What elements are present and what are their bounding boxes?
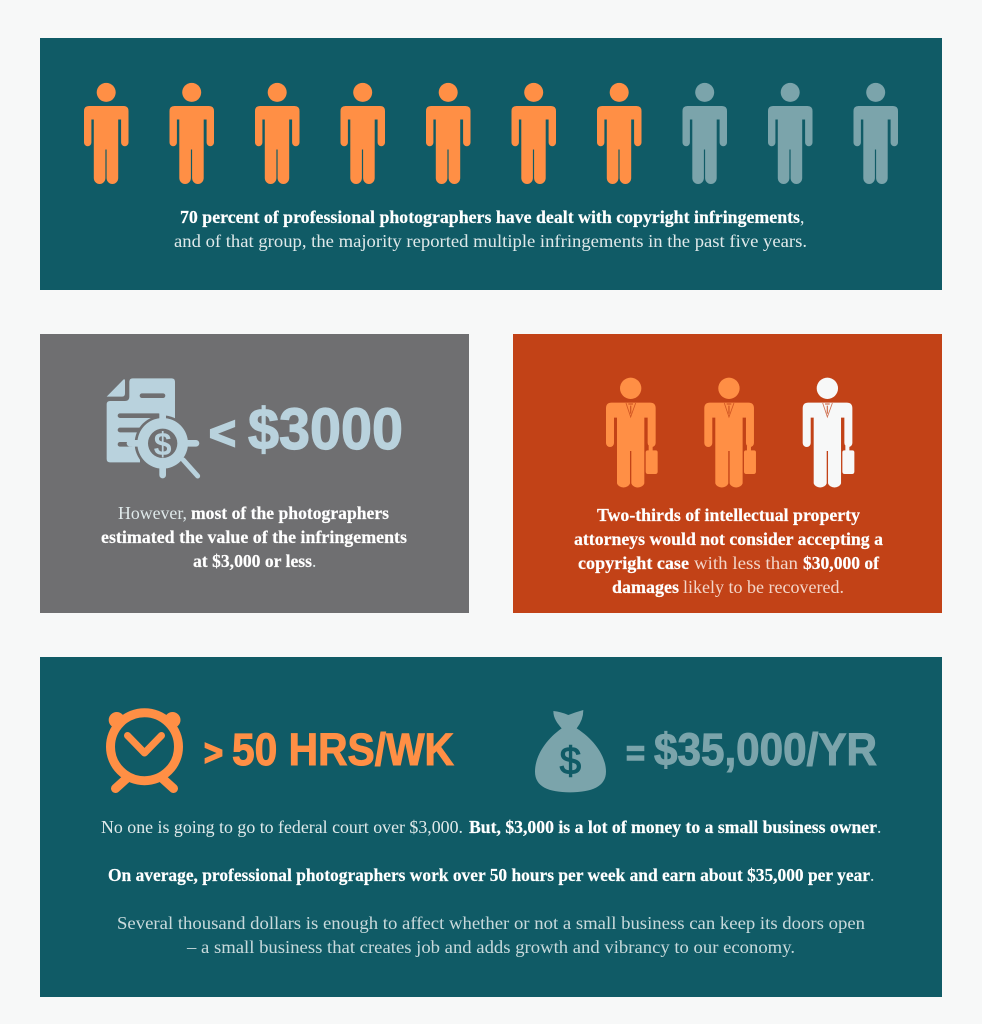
panel: hours and income [40,657,942,997]
panel: intellectual property attorneys [513,334,942,613]
text: hours and earnings statement: . [870,865,874,885]
text: two-thirds of attorneys: Two-thirds of intellectual property [597,505,860,525]
text: 70 percent statement: , [800,207,804,227]
text: 70 percent statement: 70 percent of professional photographers have dealt with copyright infringements [180,207,800,227]
text: 70 percent statement: and of that group, the majority reported multiple infringements in the past five years. [174,231,807,251]
text: two-thirds of attorneys: with less than [694,553,798,573]
text: federal court statement: . [877,817,881,837]
text: small business statement [117,913,865,957]
pictogram: ten people, seven highlighted [84,83,898,184]
figure: more than 50 hours per week: 50 HRS/WK [232,724,454,775]
text: federal court statement: But, $3,000 is a lot of money to a small business owner [469,817,877,837]
text: 70 percent statement [174,207,807,251]
text: federal court statement [101,817,881,837]
text: hours and earnings statement: On average, professional photographers work over 50 hours per week and earn about $35,000 per year [108,865,870,885]
panel: 70 percent of photographers [40,38,942,290]
figure: equals $35,000 per year: = [626,732,645,773]
figure: less than $3000: $3000 [248,397,403,462]
icon: money bag [535,710,606,792]
text: estimated value: However, [118,503,187,523]
text: small business statement: – a small business that creates job and adds growth and vibrancy to our economy. [186,937,795,957]
icon: money bag: $ [560,740,581,783]
text: two-thirds of attorneys: attorneys would not consider accepting a [574,529,883,549]
figure: less than $3000: < [209,407,236,459]
text: two-thirds of attorneys: copyright case [578,553,689,573]
icon: document with dollar magnifier [107,378,198,476]
panel: value of infringements [40,334,469,613]
text: estimated value: estimated the value of the infringements [101,527,407,547]
text: two-thirds of attorneys [574,505,883,597]
text: estimated value: at $3,000 or less [193,551,312,571]
text: two-thirds of attorneys: damages [612,577,679,597]
icon: alarm clock [109,712,180,788]
figure: more than 50 hours per week: > [204,732,223,773]
text: estimated value: most of the photographers [191,503,389,523]
text: federal court statement: No one is going to go to federal court over $3,000. [101,817,463,837]
text: small business statement: Several thousand dollars is enough to affect whether or not a small business can keep its doors open [117,913,865,933]
pictogram: three attorneys, two highlighted [606,378,854,487]
text: estimated value [101,503,407,571]
text: estimated value: . [312,551,316,571]
text: two-thirds of attorneys: $30,000 of [803,553,880,573]
icon: document with dollar magnifier: $ [154,426,172,462]
figure: equals $35,000 per year: $35,000/YR [654,724,877,775]
text: two-thirds of attorneys: likely to be recovered. [683,577,844,597]
